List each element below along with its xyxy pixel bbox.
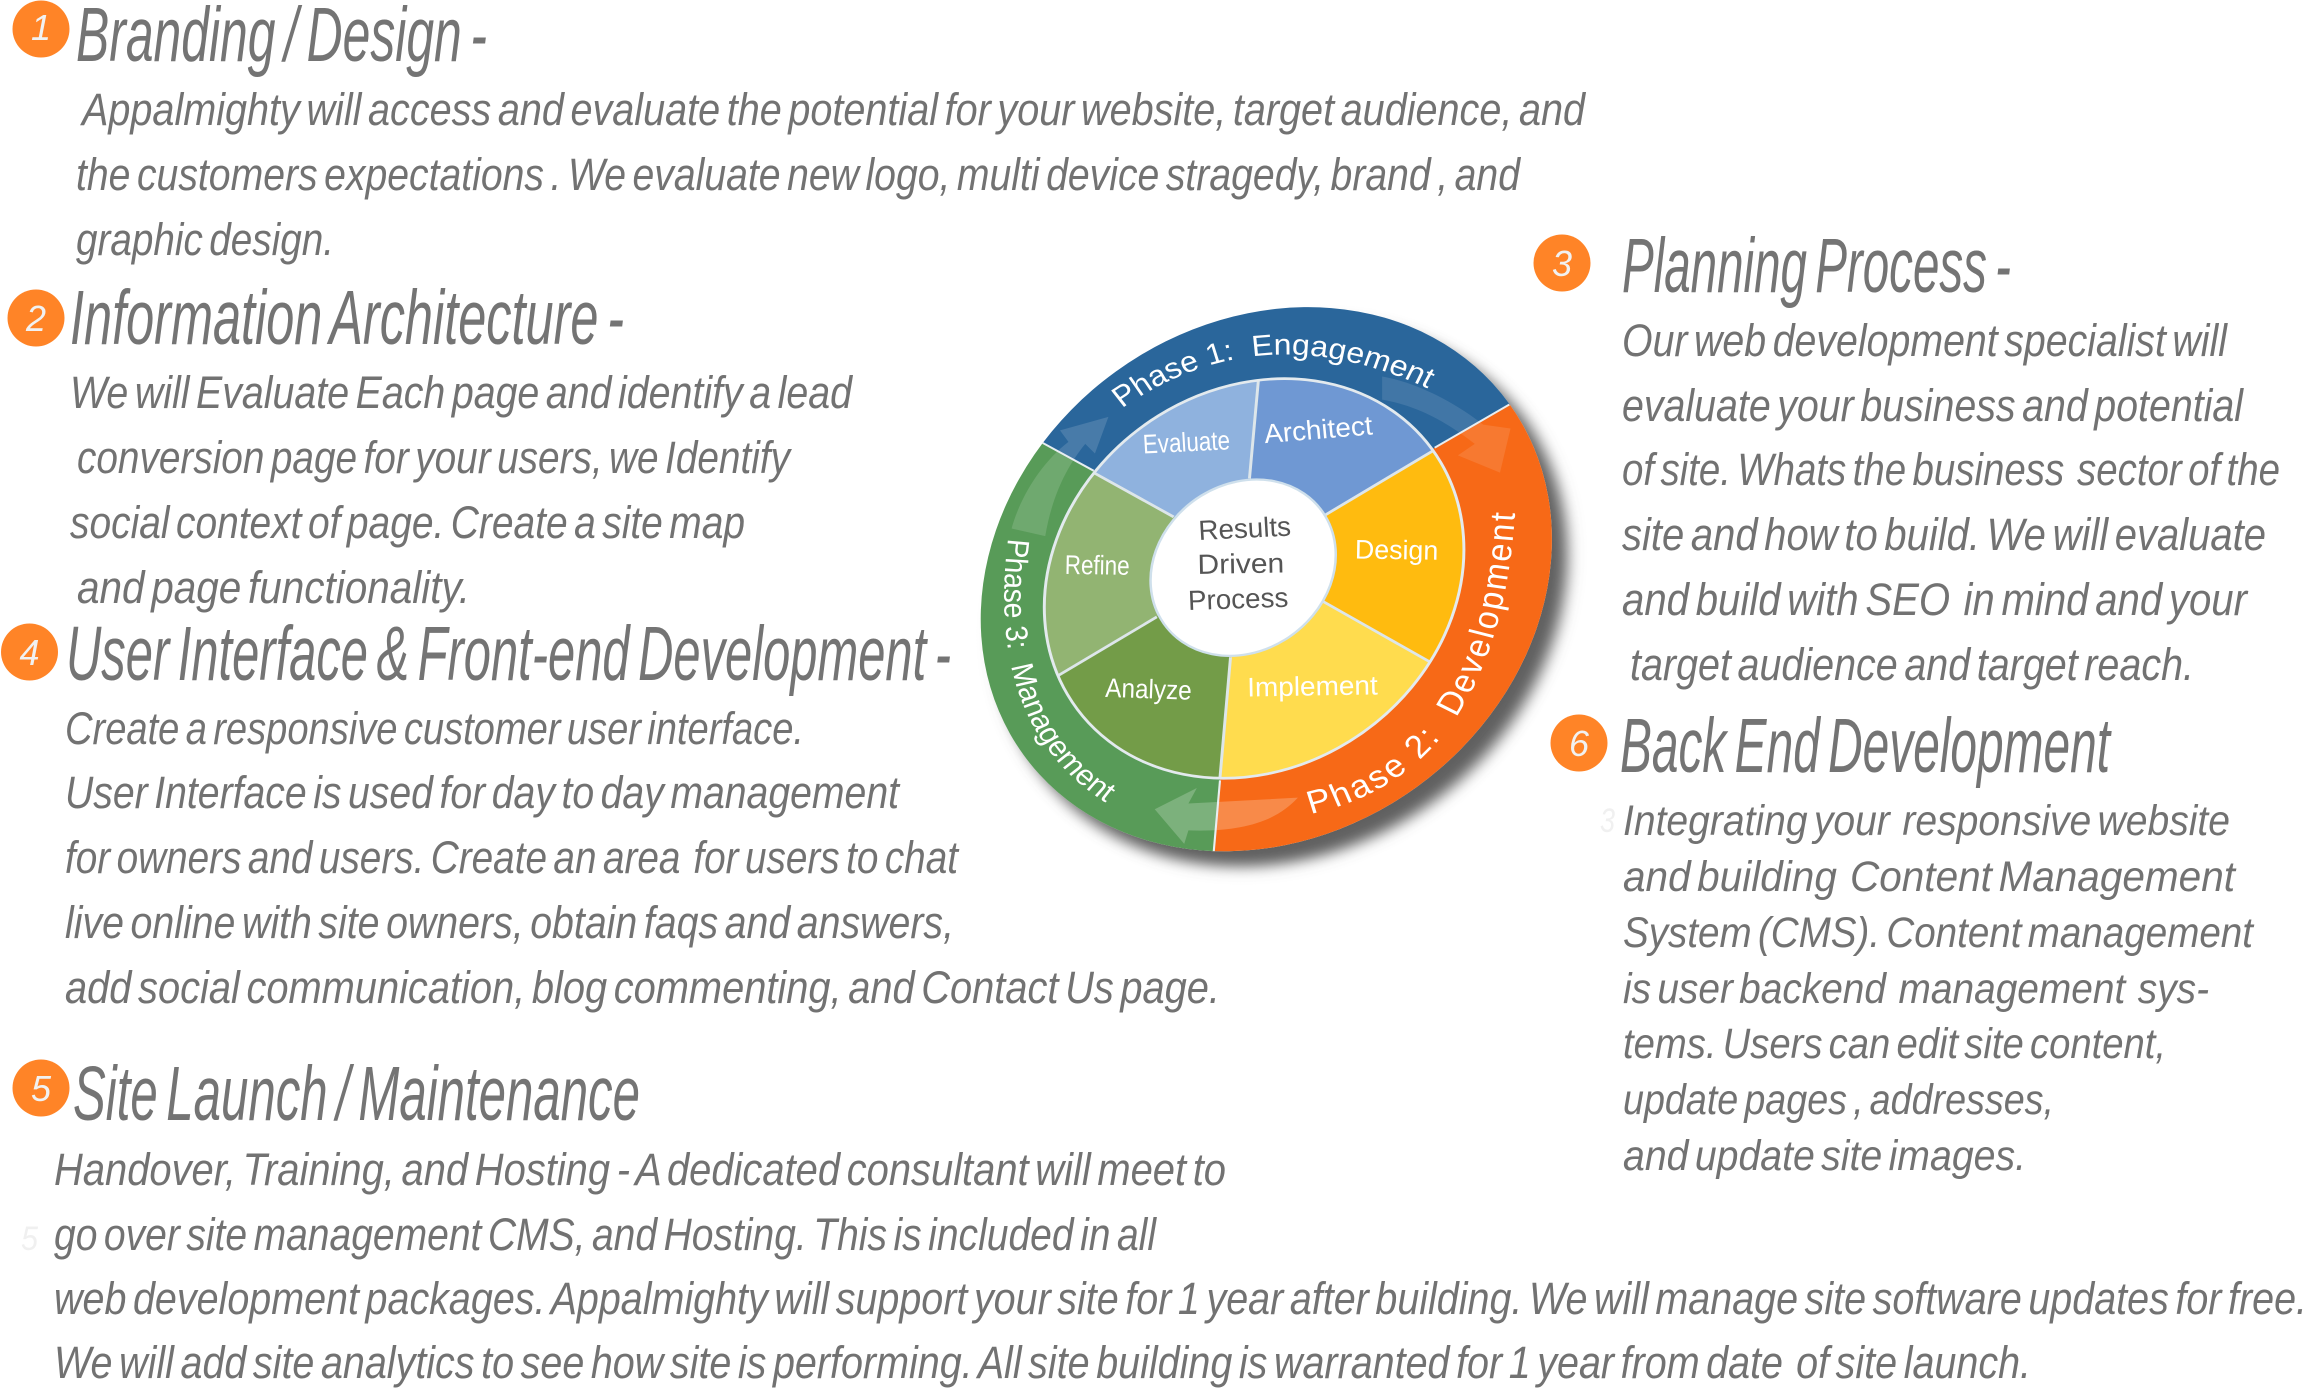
body text: Branding / Design: graphic design. — [76, 214, 334, 265]
arrow: orange to green — [1155, 788, 1298, 844]
body text: User Interface: live online with site owners, obtain faqs and answers, — [65, 897, 954, 948]
section 1: Branding / Design — [12, 0, 1587, 265]
body text: Site Launch: Handover, Training, and Hosting - A dedicated consultant will meet to — [54, 1144, 1226, 1195]
number badge 3 — [1534, 234, 1590, 292]
section 5: Site Launch / Maintenance — [12, 1051, 2307, 1388]
wheel drop shadow — [879, 218, 1685, 971]
body text: Back End Development: and update site images. — [1623, 1132, 2026, 1180]
phase 1 segment — [1042, 307, 1510, 518]
phase dividers — [1040, 405, 1509, 852]
step labels: Architect — [1263, 410, 1374, 449]
ghost numeral 3: 3 — [1600, 802, 1615, 840]
body text: User Interface: add social communication, blog commenting, and Contact Us page. — [65, 962, 1220, 1013]
body text: Branding / Design: Appalmighty will access and evaluate the potential for your website, target audience, and — [79, 84, 1587, 135]
body text: Back End Development: System (CMS). Content management — [1623, 909, 2255, 957]
phase label 3: Phase 3: Management — [1004, 540, 1115, 802]
step: Architect — [1250, 380, 1431, 514]
body text: Information Architecture: We will Evaluate Each page and identify a lead — [70, 367, 854, 418]
arrow: blue to orange — [1382, 377, 1511, 473]
body text: Information Architecture: social context of page. Create a site map — [70, 497, 745, 548]
step: Refine — [1046, 474, 1174, 674]
number badge 1 — [12, 0, 70, 58]
body text: Information Architecture: and page functionality. — [77, 562, 470, 613]
body text: Planning Process: and build with SEO in mind and your — [1622, 574, 2249, 625]
heading: User Interface and Front-end Development: User Interface & Front-end Development - — [66, 611, 951, 697]
body text: Branding / Design — [76, 84, 1587, 265]
step: Design — [1324, 452, 1462, 660]
body text: Back End Development: tems. Users can edit site content, — [1623, 1020, 2166, 1068]
hub label: Results Driven Process — [1188, 512, 1292, 617]
phase label 2: Phase 2: Development — [1306, 512, 1516, 814]
phase 3 segment — [980, 442, 1220, 852]
center hub — [1112, 446, 1374, 690]
step labels: Evaluate — [1142, 425, 1231, 459]
process wheel diagram — [980, 307, 1580, 878]
step labels: Implement — [1247, 670, 1378, 702]
number badge 5 — [12, 1060, 70, 1116]
body text: Back End Development — [1623, 797, 2255, 1180]
body text: Planning Process: Our web development specialist will — [1622, 315, 2229, 366]
ghost numeral 5: 5 — [21, 1220, 38, 1258]
section 4: User Interface and Front-end Development — [1, 611, 1220, 1013]
body text: User Interface: Create a responsive customer user interface. — [65, 703, 804, 754]
step labels — [1065, 410, 1439, 705]
hub label: Results Driven Process: Process — [1188, 583, 1289, 617]
number badge 3: 3 — [1552, 243, 1572, 284]
phase label 1: Phase 1: Engagement — [1111, 334, 1435, 407]
number badge 5: 5 — [31, 1068, 52, 1109]
phase 2 segment — [1214, 404, 1552, 852]
body text: Site Launch — [54, 1144, 2307, 1388]
hub label: Results Driven Process: Driven — [1197, 549, 1285, 581]
number badge 6: 6 — [1569, 723, 1590, 764]
number badge 2 — [8, 290, 64, 346]
body text: Back End Development: and building Content Management — [1623, 853, 2237, 901]
body text: Back End Development: Integrating your responsive website — [1623, 797, 2230, 845]
body text: Site Launch: go over site management CMS, and Hosting. This is included in all — [54, 1209, 1158, 1260]
hub label: Results Driven Process: Results — [1198, 512, 1292, 547]
number badge 4: 4 — [19, 632, 40, 673]
outer ring: three phases — [980, 307, 1552, 852]
section 2: Information Architecture — [8, 275, 854, 613]
step labels: Refine — [1065, 549, 1130, 581]
step: Analyze — [1060, 616, 1230, 777]
body text: Planning Process: target audience and target reach. — [1630, 639, 2194, 690]
body text: User Interface: User Interface is used for day to day management — [65, 767, 901, 818]
body text: Site Launch: We will add site analytics to see how site is performing. All site building is warranted for 1 year from date of site launch. — [54, 1337, 2031, 1388]
body text: Back End Development: update pages , addresses, — [1623, 1076, 2054, 1124]
body text: User Interface — [65, 703, 1220, 1013]
step labels: Design — [1355, 534, 1439, 566]
number badge 2: 2 — [25, 298, 46, 339]
body text: Information Architecture — [70, 367, 854, 613]
body text: Planning Process — [1622, 315, 2280, 690]
body text: Branding / Design: the customers expectations . We evaluate new logo, multi device stragedy, brand , and — [76, 149, 1522, 200]
heading: Information Architecture: Information Architecture - — [70, 275, 624, 361]
number badge 1: 1 — [31, 7, 51, 48]
step dividers — [1058, 377, 1437, 782]
number badge 4 — [1, 624, 58, 680]
inner wheel: six steps — [1046, 380, 1462, 777]
section 3: Planning Process — [1534, 223, 2280, 690]
step labels: Analyze — [1105, 672, 1192, 705]
arrow: green to blue — [1012, 417, 1108, 536]
step: Implement — [1222, 603, 1428, 777]
section 6: Back End Development — [1550, 703, 2255, 1180]
heading: Planning Process: Planning Process - — [1622, 223, 2011, 309]
inner ring outline — [958, 302, 1550, 855]
step: Evaluate — [1096, 382, 1257, 518]
heading: Site Launch / Maintenance: Site Launch / Maintenance — [73, 1051, 640, 1137]
body text: User Interface: for owners and users. Create an area for users to chat — [65, 832, 960, 883]
body text: Back End Development: is user backend management sys- — [1623, 965, 2209, 1013]
body text: Information Architecture: conversion page for your users, we Identify — [77, 432, 792, 483]
number badge 6 — [1550, 714, 1608, 772]
